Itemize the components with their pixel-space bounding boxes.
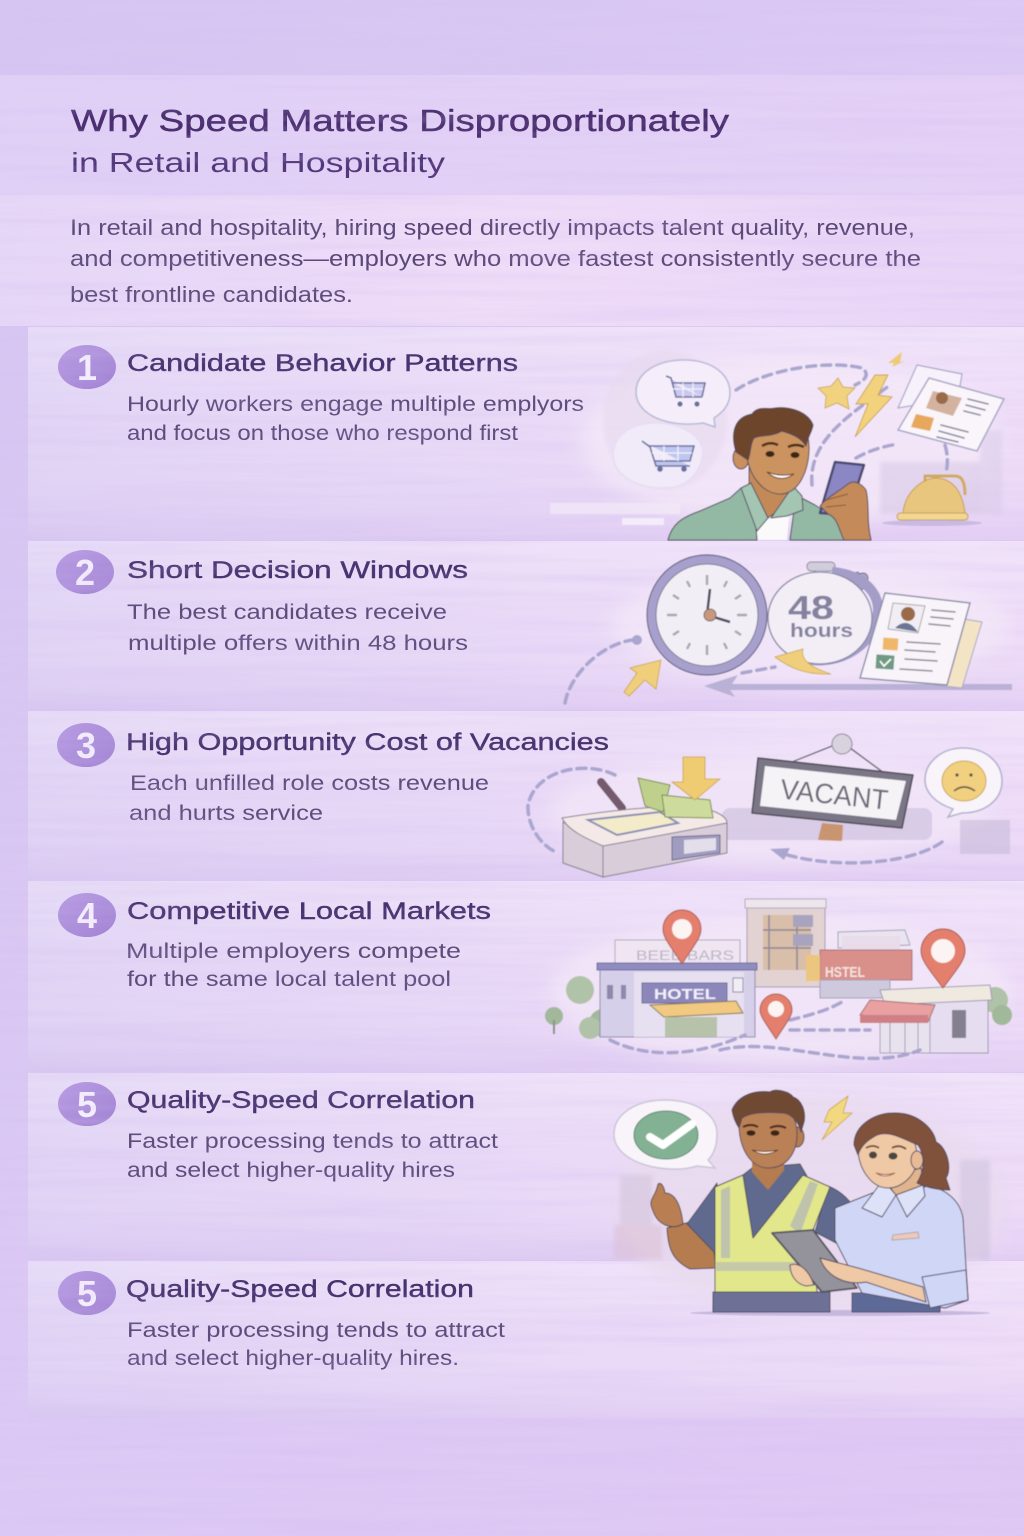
dashed paths (736, 365, 866, 390)
cash register (562, 782, 727, 877)
illustration: local market map (545, 899, 1012, 1065)
panel: quality-speed correlation repeated (28, 1261, 1024, 1418)
resume document (860, 593, 982, 688)
intro text: In retail and hospitality, hiring speed directly impacts talent quality, revenue, (70, 215, 915, 240)
backdrop strip (722, 808, 932, 840)
number badge 3: 3 (76, 725, 96, 766)
dashed curve and yellow arrow (565, 635, 661, 703)
body 2: multiple offers within 48 hours (128, 632, 468, 655)
stopwatch 48 hours: 48 (788, 589, 834, 626)
number badge 2: 2 (75, 552, 95, 593)
illustration: register and vacant sign (528, 734, 1010, 877)
wall clock (647, 555, 767, 675)
body 4 (126, 940, 461, 991)
body 5 repeated: Faster processing tends to attract (127, 1319, 505, 1342)
body 5 repeated: and select higher-quality hires. (127, 1347, 459, 1370)
tower (745, 899, 826, 987)
title: in Retail and Hospitality (71, 147, 445, 178)
red hotel (806, 930, 912, 998)
body 3 (129, 772, 489, 825)
main hotel: BEEE BARS (636, 947, 734, 963)
vacant sign (752, 734, 913, 841)
heading 5: Quality-Speed Correlation (127, 1087, 475, 1114)
number badge 2 (56, 550, 114, 594)
trees left (545, 976, 617, 1039)
heading 2: Short Decision Windows (127, 557, 468, 584)
speech bubbles with carts (613, 360, 730, 488)
main hotel: HOTEL (654, 986, 716, 1003)
body 4: Multiple employers compete (126, 940, 461, 963)
sad face bubble (925, 748, 1002, 817)
check mark bubble (614, 1100, 717, 1169)
shop (860, 985, 992, 1053)
body 5 repeated (127, 1319, 505, 1370)
heading 3: High Opportunity Cost of Vacancies (126, 729, 609, 756)
main hotel (597, 940, 757, 1037)
intro text: and competitiveness—employers who move fastest consistently secure the (70, 246, 921, 271)
panel: candidate behavior patterns (28, 327, 1024, 540)
number badge 4: 4 (77, 895, 97, 936)
illustration: two staff members (614, 1090, 1005, 1316)
body 4: for the same local talent pool (127, 968, 451, 991)
number badge 4 (58, 893, 116, 937)
woman with tablet (772, 1113, 968, 1312)
number badge 5 repeated: 5 (77, 1273, 97, 1314)
illustration: clock, stopwatch and resume (565, 555, 1012, 703)
number badge 3 (57, 723, 115, 767)
stopwatch 48 hours: hours (790, 621, 853, 642)
young man holding phone (668, 408, 871, 540)
intro band (0, 195, 1024, 326)
intro text: best frontline candidates. (70, 282, 353, 307)
cash and arrow (638, 757, 720, 818)
number badge 5 repeated (58, 1271, 116, 1315)
number badge 5: 5 (77, 1084, 97, 1125)
ground shadow (690, 1310, 990, 1316)
heading 5 repeated: Quality-Speed Correlation (126, 1276, 474, 1303)
body 1 (127, 393, 584, 445)
lightning bolt (822, 1096, 852, 1140)
body 5 (127, 1130, 498, 1182)
title band (0, 75, 1024, 195)
title (71, 103, 730, 178)
location pins (663, 910, 965, 1039)
dashed loops (528, 768, 942, 863)
number badge 1: 1 (77, 347, 97, 388)
dashed routes (610, 1000, 920, 1058)
resume cards (898, 365, 1004, 451)
body 2 (127, 601, 468, 655)
number badge 1 (58, 345, 116, 389)
title: Why Speed Matters Disproportionately (71, 103, 730, 138)
panel: quality-speed correlation (28, 1073, 1024, 1260)
service bell (882, 476, 982, 526)
man with safety vest (651, 1090, 853, 1312)
panel: competitive local markets (28, 881, 1024, 1072)
heading 1: Candidate Behavior Patterns (127, 350, 518, 377)
intro text (70, 215, 921, 307)
long return arrow (704, 675, 1012, 697)
vacant sign: VACANT (779, 774, 890, 816)
number badge 5 (58, 1082, 116, 1126)
body 5: Faster processing tends to attract (127, 1130, 498, 1153)
red hotel: HSTEL (825, 964, 865, 981)
panel: high opportunity cost (28, 711, 1024, 880)
body 2: The best candidates receive (127, 601, 447, 624)
body 3: and hurts service (129, 802, 323, 825)
body 5: and select higher-quality hires (127, 1159, 455, 1182)
body 1: and focus on those who respond first (127, 422, 518, 445)
body 3: Each unfilled role costs revenue (130, 772, 489, 795)
heading 4: Competitive Local Markets (127, 898, 491, 925)
illustration: candidate with phone (550, 350, 1004, 540)
panel: short decision windows (28, 541, 1024, 710)
stopwatch 48 hours (742, 562, 878, 674)
trees right (982, 987, 1012, 1025)
star and lightning (818, 352, 905, 437)
body 1: Hourly workers engage multiple emplyors (127, 393, 584, 416)
